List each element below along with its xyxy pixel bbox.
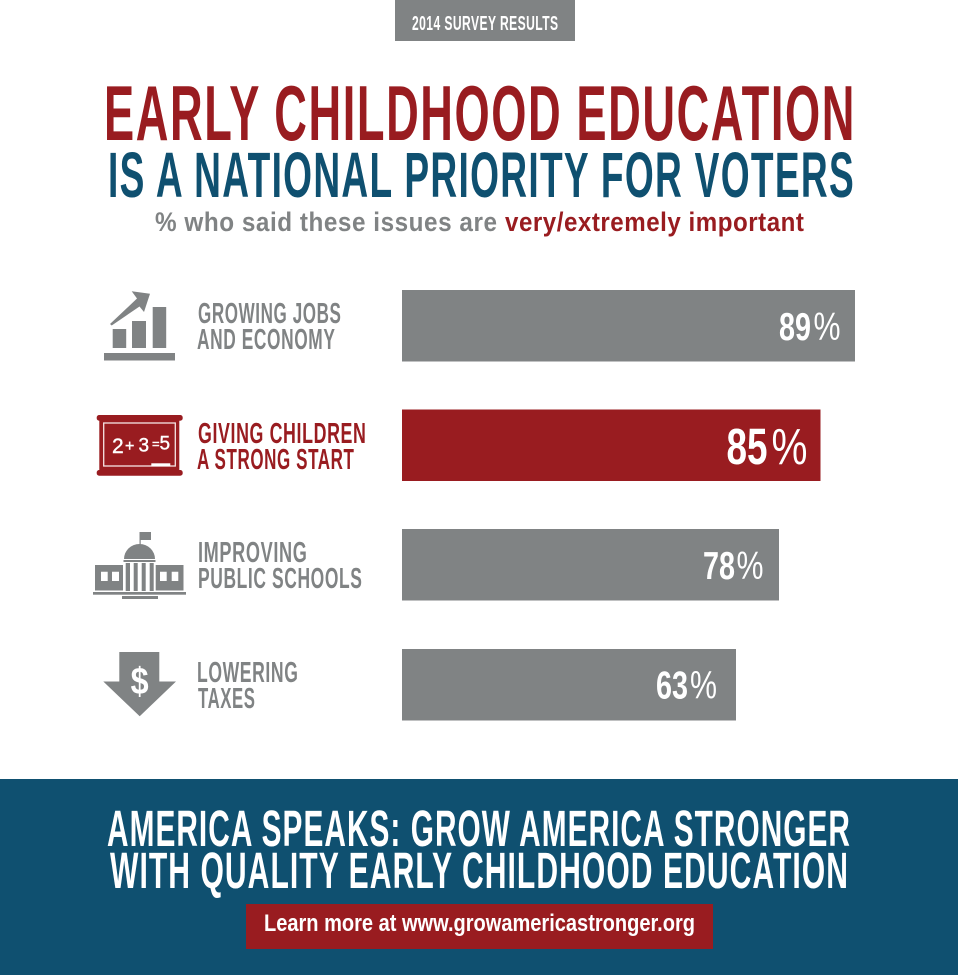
- subtitle: very/extremely important: [505, 207, 804, 237]
- bar: 63%: [402, 649, 736, 720]
- label: PUBLIC SCHOOLS: [198, 563, 362, 595]
- icon: rising bar chart: [104, 291, 175, 360]
- bar: 78%: %: [736, 545, 764, 588]
- bar: 85%: 85: [726, 418, 768, 475]
- label: [198, 537, 362, 595]
- footer heading: [107, 800, 851, 899]
- bar: 89%: %: [814, 306, 840, 349]
- bar: 89%: [402, 290, 855, 362]
- icon: chalkboard: 3: [138, 436, 149, 456]
- icon: down arrow with dollar sign: [103, 652, 176, 716]
- call to action button: [246, 904, 713, 949]
- label: AND ECONOMY: [197, 324, 336, 356]
- icon: capitol building: [93, 532, 186, 599]
- bar: 78%: [402, 529, 779, 600]
- label: LOWERING: [197, 657, 298, 689]
- row: lowering taxes: [103, 649, 736, 720]
- icon: down arrow with dollar sign: $: [131, 661, 149, 703]
- call to action button: Learn more at www.growamericastronger.org: [264, 910, 695, 937]
- icon: chalkboard: [97, 415, 183, 476]
- badge: 2014 survey results: [395, 0, 575, 41]
- bar: 78%: 78: [703, 545, 735, 588]
- icon: chalkboard: +: [125, 438, 134, 455]
- label: [197, 657, 298, 715]
- bar: 63%: 63: [656, 664, 688, 708]
- label: A STRONG START: [197, 444, 354, 476]
- icon: chalkboard: 5: [160, 434, 170, 454]
- icon: chalkboard: =: [152, 436, 160, 451]
- subtitle: [155, 207, 804, 237]
- bar: 63%: %: [690, 664, 717, 708]
- label: [197, 418, 366, 476]
- title: [104, 69, 856, 211]
- label: IMPROVING: [198, 537, 308, 569]
- label: GROWING JOBS: [198, 298, 342, 330]
- footer panel: [0, 779, 958, 975]
- row: giving children a strong start: [97, 410, 820, 481]
- row: improving public schools: [93, 529, 779, 600]
- row: growing jobs and economy: [104, 290, 855, 362]
- icon: chalkboard: 2: [112, 435, 124, 458]
- bar: 85%: %: [772, 418, 808, 475]
- label: TAXES: [198, 683, 256, 715]
- subtitle: % who said these issues are: [155, 207, 498, 237]
- label: GIVING CHILDREN: [198, 418, 366, 450]
- label: [197, 298, 342, 356]
- badge: 2014 survey results: 2014 SURVEY RESULTS: [412, 13, 558, 35]
- bar: 85%: [402, 410, 820, 481]
- bar: 89%: 89: [779, 306, 811, 349]
